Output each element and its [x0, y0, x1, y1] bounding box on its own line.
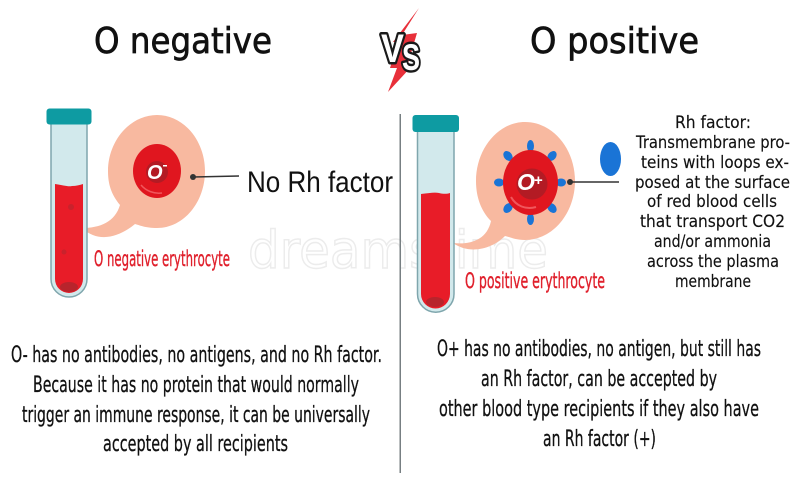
- icon: test tube: [46, 108, 92, 297]
- center divider: [400, 114, 401, 473]
- icon: VS lightning badge: S: [402, 37, 420, 78]
- icon: O positive cell with Rh proteins: O: [517, 169, 535, 195]
- text block: Rh factor definition: across the plasma: [647, 252, 779, 272]
- title: O positive: O positive: [530, 21, 699, 62]
- icon: test tube: [412, 115, 459, 312]
- text block: Rh factor definition: Rh factor:: [675, 113, 751, 133]
- icon: O negative red cell: O: [147, 162, 163, 184]
- label: O negative erythrocyte: O negative erythrocyte: [94, 247, 230, 271]
- text block: Rh factor definition: of red blood cells: [647, 192, 777, 212]
- title: O negative: O negative: [94, 21, 272, 62]
- watermark: dreamstime: [248, 221, 548, 281]
- panel: O positive illustration: [412, 115, 621, 312]
- pointer line: [567, 179, 619, 185]
- icon: VS lightning badge: V: [381, 27, 404, 71]
- text block: O positive description: [437, 337, 761, 452]
- label: No Rh factor: No Rh factor: [247, 166, 393, 199]
- text block: Rh factor definition: and/or ammonia: [654, 232, 771, 252]
- text block: Rh factor definition: that transport CO2: [640, 212, 785, 232]
- label: O positive erythrocyte: O positive erythrocyte: [465, 269, 605, 293]
- text block: O negative description: [11, 343, 382, 457]
- text block: Rh factor definition: membrane: [675, 272, 751, 292]
- text block: O negative description: O- has no antibodies, no antigens, and no Rh factor.: [11, 343, 382, 368]
- text block: Rh factor definition: [635, 113, 790, 292]
- icon: speech bubble: [453, 122, 575, 249]
- pointer line: [190, 174, 239, 180]
- panel: O negative illustration: [46, 108, 393, 297]
- icon: VS lightning badge: [381, 8, 420, 92]
- icon: O positive cell with Rh proteins: [494, 140, 566, 225]
- text block: O negative description: accepted by all recipients: [103, 432, 288, 457]
- icon: O positive cell with Rh proteins: +: [534, 172, 543, 189]
- icon: O negative red cell: [133, 144, 181, 198]
- icon: speech bubble: [82, 115, 205, 237]
- text block: O negative description: Because it has no protein that would normally: [33, 373, 359, 398]
- text block: O negative description: trigger an immune response, it can be universally: [22, 403, 370, 428]
- text block: O positive description: an Rh factor (+): [543, 427, 656, 452]
- icon: blue Rh protein: [600, 142, 621, 176]
